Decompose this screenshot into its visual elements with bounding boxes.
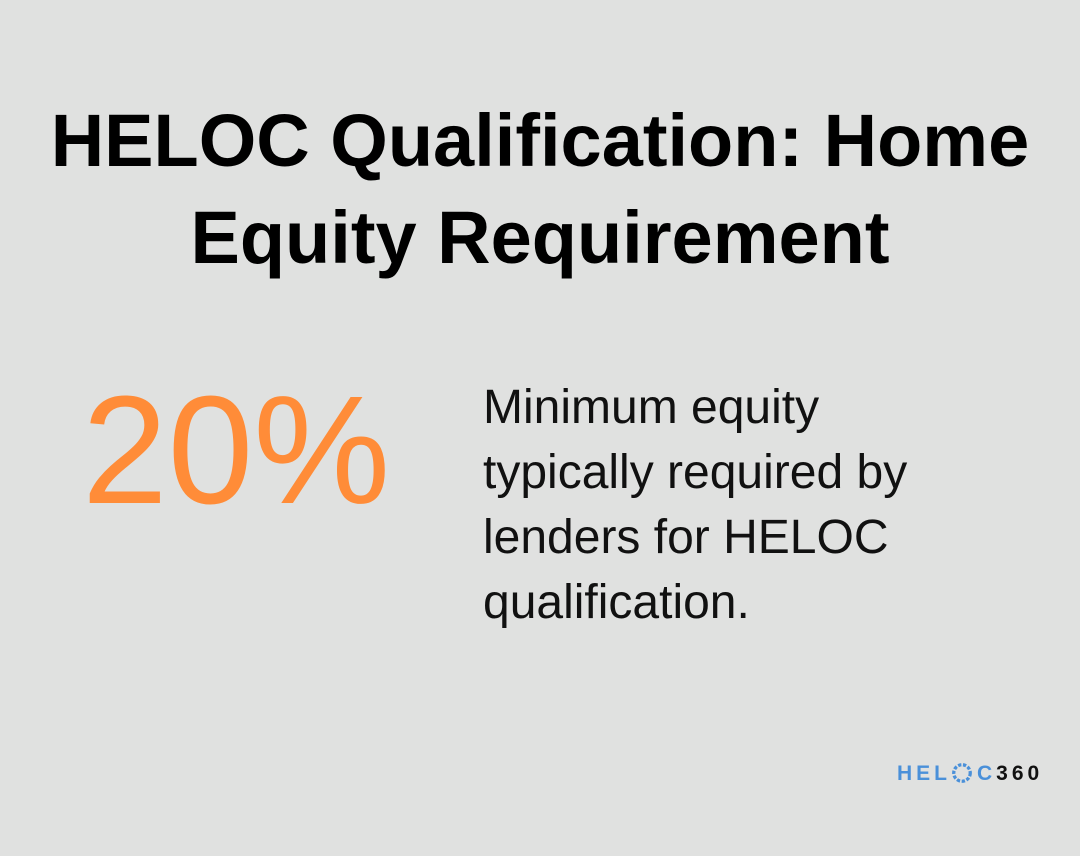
description text: Minimum equity typically required by lenders for HELOC qualification.	[483, 381, 907, 629]
stat: 20%: 20%	[82, 364, 390, 536]
title	[51, 99, 1029, 279]
title: Equity Requirement	[190, 196, 890, 279]
title: HELOC Qualification: Home	[51, 99, 1029, 182]
logo: HELOC360: HEL C360	[897, 762, 1043, 785]
